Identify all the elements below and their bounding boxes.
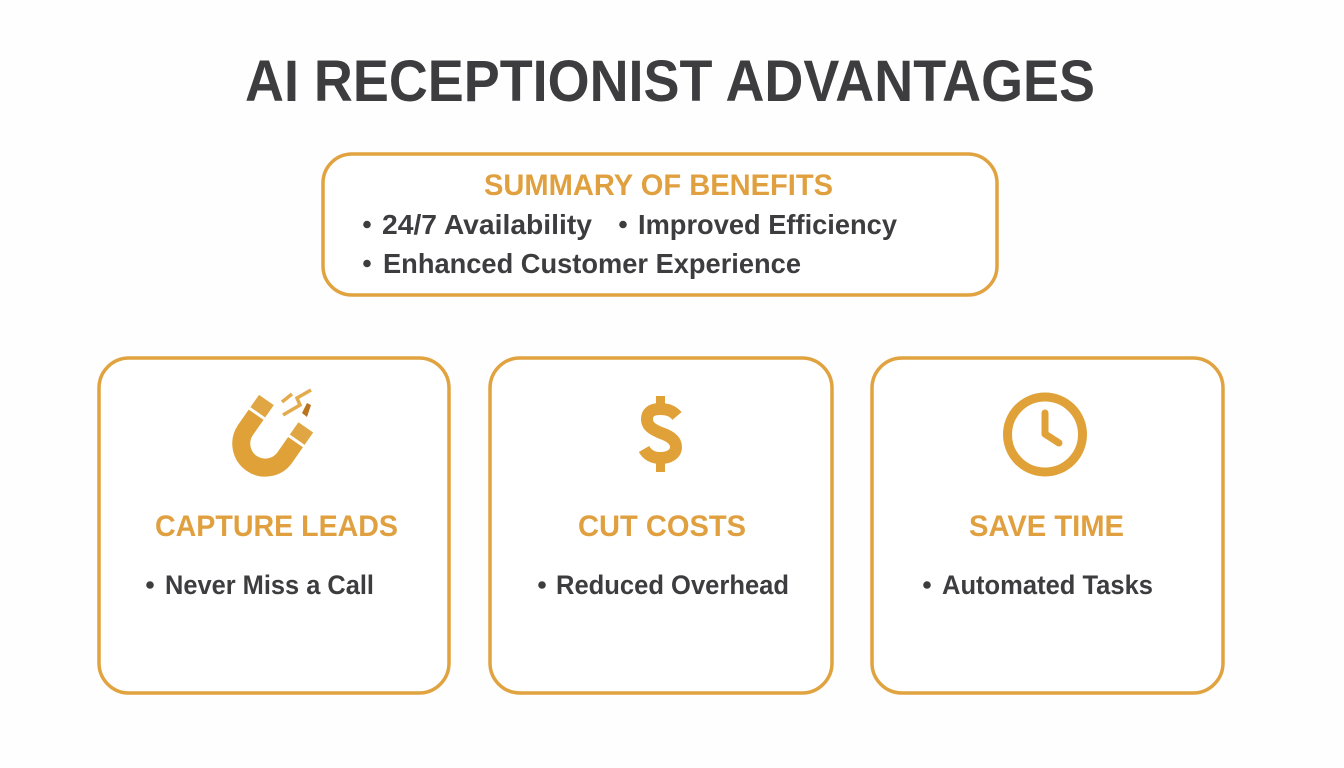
icon: clock	[1008, 397, 1082, 472]
summary bullet: 24/7 availability: 24/7 Availability	[382, 209, 592, 240]
bullet: automated tasks: Automated Tasks	[942, 570, 1153, 600]
panel: summary of benefits	[323, 154, 997, 295]
panel: cut costs	[490, 358, 832, 693]
title: AI RECEPTIONIST ADVANTAGES	[245, 49, 1095, 114]
icon: dollar sign	[644, 396, 677, 472]
panel: save time	[872, 358, 1223, 693]
icon: magnet	[241, 390, 311, 468]
summary bullet: improved efficiency: Improved Efficiency	[638, 209, 897, 240]
bullet: never miss a call: Never Miss a Call	[165, 570, 374, 600]
heading: save time: SAVE TIME	[969, 510, 1124, 543]
heading: cut costs: CUT COSTS	[578, 510, 746, 543]
panel: capture leads	[99, 358, 449, 693]
summary heading: SUMMARY OF BENEFITS	[484, 169, 833, 202]
bullet: reduced overhead: Reduced Overhead	[556, 570, 789, 600]
summary bullet: enhanced customer experience: Enhanced Customer Experience	[383, 248, 801, 279]
heading: capture leads: CAPTURE LEADS	[155, 510, 398, 543]
